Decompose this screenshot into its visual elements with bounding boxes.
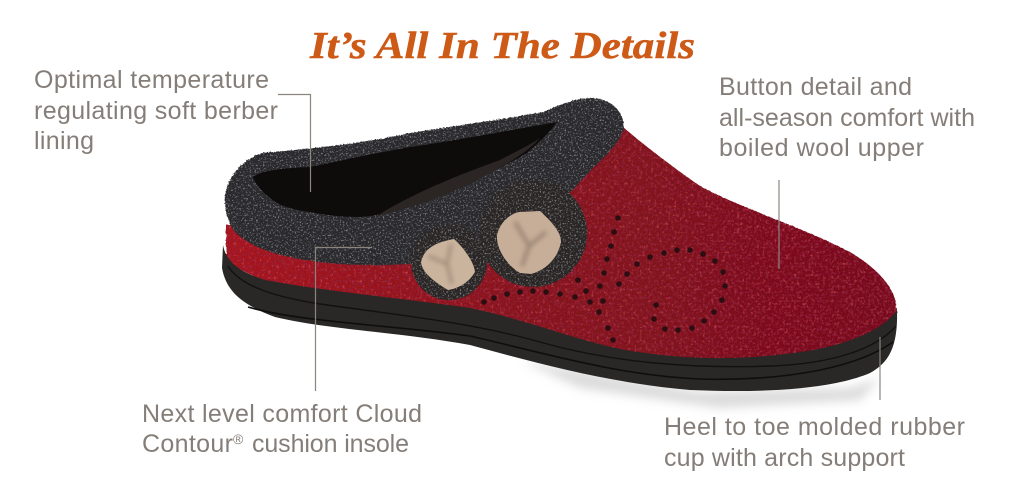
stitched spiral [481, 215, 728, 343]
ground shadow [520, 360, 880, 408]
slipper illustration [222, 98, 897, 408]
text: cushion insole: Contour [142, 430, 233, 458]
rubber sole [222, 245, 897, 391]
text: berber lining [34, 66, 278, 155]
leader line: wool upper [778, 180, 780, 269]
text: cushion insole: Next level comfort Cloud [142, 400, 422, 428]
callout: wool upper [719, 73, 975, 269]
text: cushion insole [142, 400, 422, 458]
text: cushion insole: cushion insole [252, 430, 409, 458]
text: cushion insole: ® [233, 431, 244, 447]
title: It’s All In The Details [309, 25, 695, 67]
text: rubber cup [664, 413, 965, 472]
charcoal collar [225, 98, 624, 265]
shoe opening [253, 122, 557, 217]
leader line: rubber cup [879, 337, 881, 400]
text: rubber cup: cup with arch support [664, 444, 905, 472]
text: wool upper: all-season comfort with [719, 104, 975, 132]
leader line: berber lining [278, 94, 310, 192]
text: wool upper [719, 73, 975, 162]
red wool upper [226, 126, 897, 372]
small button [411, 224, 487, 300]
text: wool upper: boiled wool upper [719, 134, 924, 162]
callout: berber lining [34, 66, 310, 192]
text: berber lining: regulating soft berber [34, 97, 278, 125]
callout: rubber cup [664, 337, 965, 472]
text: rubber cup: Heel to toe molded rubber [664, 413, 965, 441]
large button [479, 179, 587, 287]
text: berber lining: Optimal temperature [34, 66, 269, 94]
leader line: cushion insole [316, 248, 372, 391]
callout: cushion insole [142, 248, 422, 458]
text: berber lining: lining [34, 127, 94, 155]
text: wool upper: Button detail and [719, 73, 912, 101]
